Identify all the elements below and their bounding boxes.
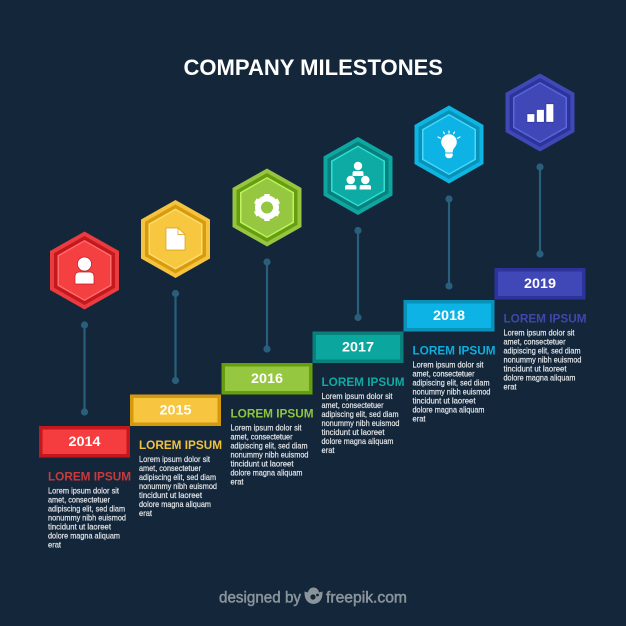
heading: LOREM IPSUM: [504, 312, 586, 326]
text block: tincidunt ut laoreet: [504, 364, 567, 374]
text block: erat: [48, 540, 62, 550]
heading: LOREM IPSUM: [48, 470, 131, 484]
text block: dolore magna aliquam: [48, 530, 120, 540]
icon: teal hexagon with team: [324, 137, 392, 215]
text block: dolore magna aliquam: [139, 499, 211, 509]
text block: Lorem ipsum dolor sit: [504, 328, 575, 338]
text block: adipiscing elit, sed diam: [412, 378, 490, 388]
year bar: [494, 268, 586, 300]
text block: amet, consectetuer: [504, 336, 566, 346]
year bar: 2019: [524, 275, 556, 291]
text block: dolore magna aliquam: [504, 372, 576, 382]
year bar: 2014: [68, 433, 101, 449]
milestone 2015: [130, 200, 222, 518]
text block: dolore magna aliquam: [322, 436, 394, 446]
text block: amet, consectetuer: [230, 432, 293, 442]
text block: Lorem ipsum dolor sit: [322, 391, 393, 401]
text block: amet, consectetuer: [412, 368, 475, 378]
text block: [48, 486, 126, 550]
text block: Lorem ipsum dolor sit: [48, 486, 120, 496]
connector line: [354, 227, 362, 321]
text block: [139, 454, 217, 518]
icon: blue hexagon with light bulb: [414, 106, 484, 184]
text block: nonummy nibh euismod: [139, 481, 217, 491]
text block: tincidunt ut laoreet: [412, 396, 476, 406]
heading: LOREM IPSUM: [139, 438, 222, 452]
text block: dolore magna aliquam: [412, 404, 485, 414]
year bar: [39, 426, 130, 458]
text block: dolore magna aliquam: [230, 468, 303, 478]
text block: erat: [139, 508, 153, 518]
text block: amet, consectetuer: [139, 463, 201, 473]
heading: LOREM IPSUM: [230, 406, 314, 420]
text block: [504, 328, 582, 392]
text block: adipiscing elit, sed diam: [504, 346, 581, 356]
connector line: [172, 290, 179, 384]
text block: adipiscing elit, sed diam: [322, 409, 399, 419]
milestone 2018: [404, 106, 496, 424]
text block: erat: [504, 382, 517, 392]
text block: tincidunt ut laoreet: [322, 427, 385, 437]
heading: LOREM IPSUM: [322, 375, 404, 389]
icon: indigo hexagon with bar chart: [506, 74, 574, 152]
text block: nonummy nibh euismod: [48, 512, 126, 522]
text block: [412, 360, 491, 424]
connector line: [81, 321, 88, 416]
text block: adipiscing elit, sed diam: [230, 440, 308, 450]
year bar: 2017: [342, 338, 374, 354]
text block: nonummy nibh euismod: [322, 418, 400, 428]
text block: tincidunt ut laoreet: [230, 458, 294, 468]
milestone 2016: [222, 168, 314, 486]
year bar: [222, 363, 312, 394]
year bar: [130, 394, 221, 426]
year bar: 2018: [433, 307, 465, 323]
text block: tincidunt ut laoreet: [48, 522, 112, 532]
footer credit: freepik.com: [326, 590, 407, 606]
text block: erat: [412, 414, 426, 424]
text block: amet, consectetuer: [48, 494, 110, 504]
text block: erat: [230, 476, 244, 486]
heading: LOREM IPSUM: [412, 344, 496, 358]
text block: [322, 391, 400, 455]
footer credit: [219, 588, 407, 606]
icon: red hexagon with person: [50, 232, 119, 310]
milestone 2019: [494, 74, 586, 392]
text block: Lorem ipsum dolor sit: [412, 360, 484, 370]
text block: Lorem ipsum dolor sit: [139, 454, 211, 464]
year bar: [404, 300, 494, 332]
icon: yellow hexagon with document: [141, 200, 210, 278]
text block: adipiscing elit, sed diam: [48, 504, 125, 514]
milestone 2014: [39, 232, 131, 550]
connector line: [445, 195, 453, 290]
connector line: [536, 163, 544, 258]
text block: adipiscing elit, sed diam: [139, 472, 216, 482]
icon: green hexagon with gear: [232, 168, 302, 246]
footer credit: designed by: [219, 590, 301, 606]
text block: nonummy nibh euismod: [504, 354, 582, 364]
text block: nonummy nibh euismod: [230, 450, 309, 460]
text block: nonummy nibh euismod: [412, 386, 491, 396]
text block: Lorem ipsum dolor sit: [230, 422, 302, 432]
text block: erat: [322, 445, 335, 455]
title: COMPANY MILESTONES: [184, 55, 443, 80]
year bar: [312, 332, 404, 363]
connector line: [263, 258, 271, 353]
icon: freepik logo: [304, 588, 323, 604]
text block: [230, 422, 309, 486]
text block: amet, consectetuer: [322, 400, 384, 410]
year bar: 2016: [251, 370, 283, 386]
milestone 2017: [312, 137, 404, 455]
text block: tincidunt ut laoreet: [139, 490, 203, 500]
year bar: 2015: [160, 402, 192, 418]
